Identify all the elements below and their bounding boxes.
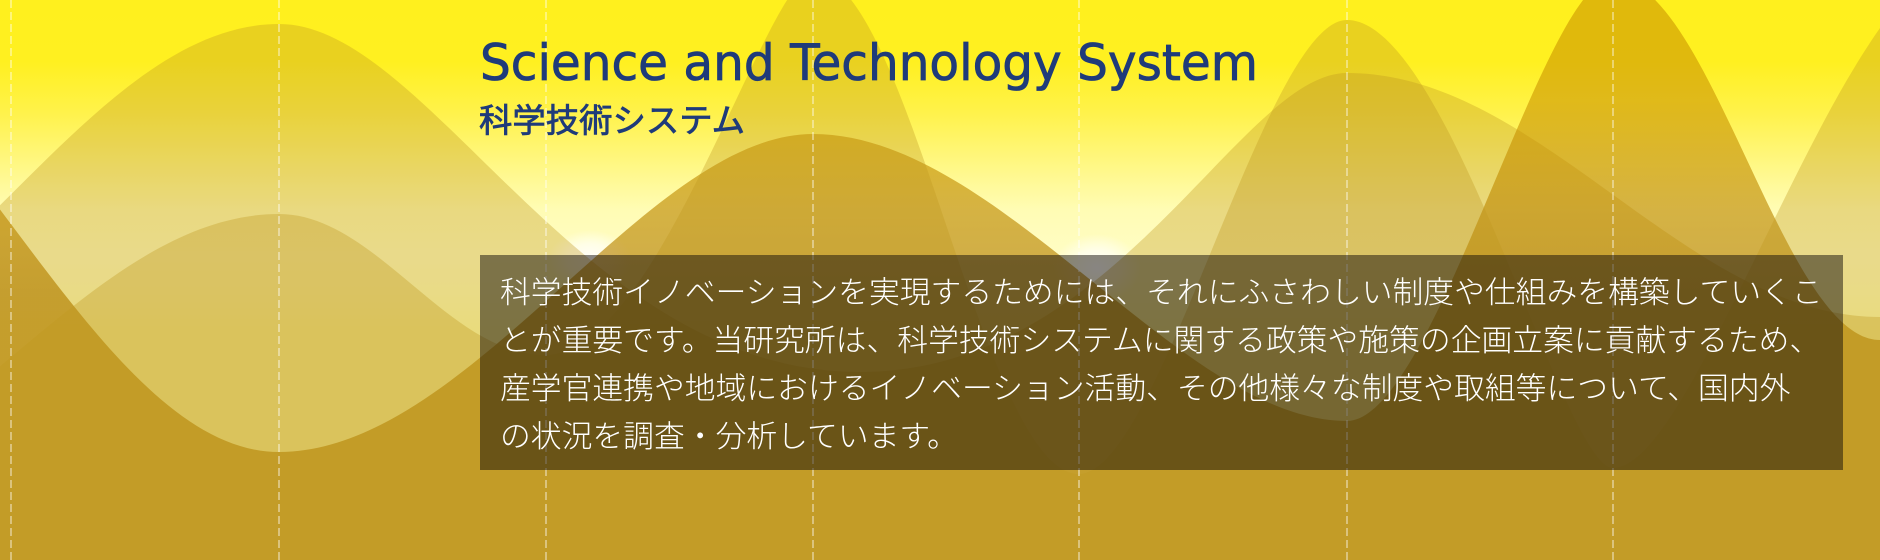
text block: description: 産学官連携や地域におけるイノベーション活動、その他様々な制度や取組等について、国内外 <box>500 371 1790 406</box>
pale glow in valleys <box>548 230 1141 302</box>
headings <box>479 34 1258 139</box>
title: English: Science and Technology System <box>480 34 1258 92</box>
text block: description: の状況を調査・分析しています。 <box>500 419 958 454</box>
panel: description box <box>480 255 1843 470</box>
text block: description <box>500 275 1823 454</box>
title: Japanese: 科学技術システム <box>479 102 745 139</box>
text block: description: とが重要です。当研究所は、科学技術システムに関する政策や施策の企画立案に貢献するため、 <box>500 323 1820 358</box>
text block: description: 科学技術イノベーションを実現するためには、それにふさわしい制度や仕組みを構築していくこ <box>500 275 1823 310</box>
